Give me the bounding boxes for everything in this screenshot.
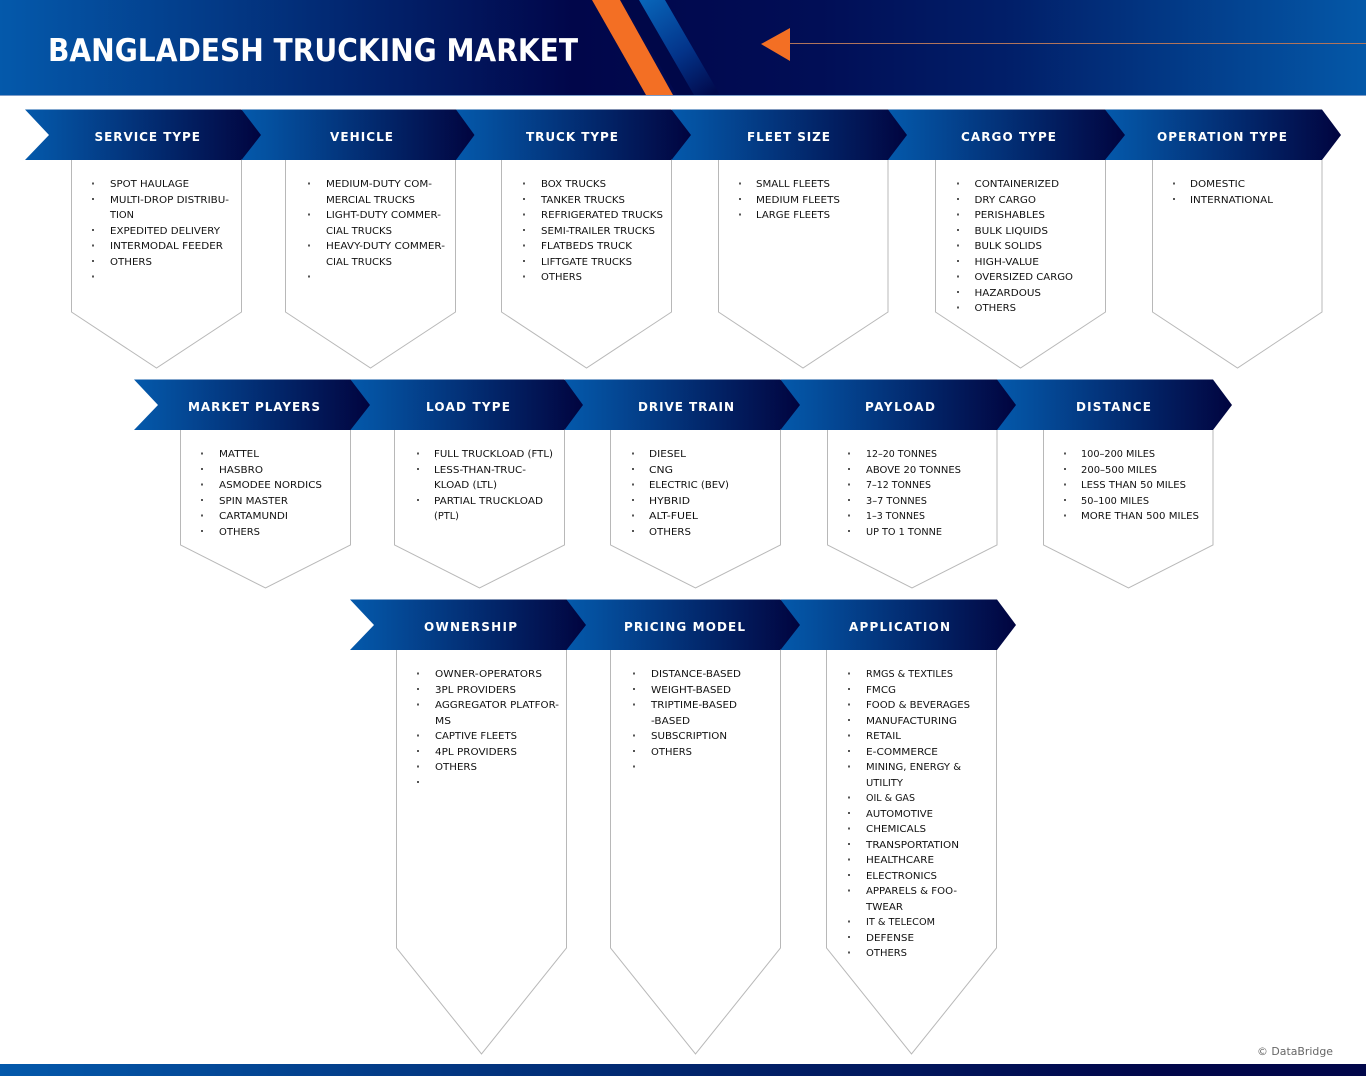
panel: payload: PAYLOAD xyxy=(865,400,935,414)
panel: operation type xyxy=(1105,110,1341,368)
panel: payload: 1–3 TONNES xyxy=(866,511,925,522)
copyright credit: © DataBridge xyxy=(1257,1045,1333,1058)
panel: application: IT & TELECOM xyxy=(866,917,935,928)
panel: market players: MARKET PLAYERS xyxy=(188,400,320,414)
panel: application: APPLICATION xyxy=(849,620,950,634)
panel: pricing model xyxy=(566,600,800,1054)
panel: application: TWEAR xyxy=(865,902,903,913)
panel: application: TRANSPORTATION xyxy=(865,840,959,851)
panel: application: FMCG xyxy=(866,685,896,696)
panel: load type: LOAD TYPE xyxy=(426,400,510,414)
panel: fleet size: FLEET SIZE xyxy=(747,130,830,144)
panel: cargo type: HIGH-VALUE xyxy=(974,257,1039,268)
panel: application: DEFENSE xyxy=(866,933,914,944)
panel: load type: KLOAD (LTL) xyxy=(434,480,497,491)
panel: service type: TION xyxy=(109,210,134,221)
panel: payload: 3–7 TONNES xyxy=(866,496,927,507)
panel: distance: MORE THAN 500 MILES xyxy=(1081,511,1199,522)
panel: truck type: TANKER TRUCKS xyxy=(540,195,625,206)
panel: payload: UP TO 1 TONNE xyxy=(866,527,942,538)
panel: payload: 12–20 TONNES xyxy=(866,449,937,460)
panel: service type: INTERMODAL FEEDER xyxy=(110,241,223,252)
panel: drive train: DIESEL xyxy=(649,449,687,460)
title: BANGLADESH TRUCKING MARKET xyxy=(48,33,578,69)
panel: drive train: CNG xyxy=(649,465,673,476)
panel: truck type xyxy=(456,110,691,368)
panel: cargo type: OTHERS xyxy=(974,303,1016,314)
panel: pricing model: OTHERS xyxy=(651,747,692,758)
panel: service type: SPOT HAULAGE xyxy=(110,179,189,190)
footer bar xyxy=(0,1064,1366,1076)
row 2 of categories xyxy=(134,380,1232,588)
panel: load type: (PTL) xyxy=(434,511,459,522)
panel: market players: HASBRO xyxy=(219,465,263,476)
panel: truck type: SEMI-TRAILER TRUCKS xyxy=(541,226,655,237)
panel: fleet size: SMALL FLEETS xyxy=(756,179,830,190)
orange diagonal stripe xyxy=(592,0,673,95)
panel: application: MINING, ENERGY & xyxy=(866,762,961,773)
panel: market players: MATTEL xyxy=(219,449,260,460)
panel: pricing model: WEIGHT-BASED xyxy=(651,685,731,696)
panel: distance: LESS THAN 50 MILES xyxy=(1081,480,1186,491)
panel: application: FOOD & BEVERAGES xyxy=(866,700,970,711)
panel: ownership: OWNERSHIP xyxy=(424,620,517,634)
panel: market players: OTHERS xyxy=(219,527,260,538)
panel: ownership: 4PL PROVIDERS xyxy=(435,747,517,758)
panel: service type: MULTI-DROP DISTRIBU- xyxy=(110,195,229,206)
panel: vehicle: CIAL TRUCKS xyxy=(326,226,392,237)
panel: distance: 100–200 MILES xyxy=(1081,449,1155,460)
panel: service type: OTHERS xyxy=(110,257,152,268)
panel: truck type: LIFTGATE TRUCKS xyxy=(541,257,632,268)
panel: ownership xyxy=(350,600,586,1054)
panel: distance: DISTANCE xyxy=(1076,400,1151,414)
panel: cargo type: BULK SOLIDS xyxy=(974,241,1042,252)
arrow xyxy=(761,28,1366,61)
panel: cargo type: CARGO TYPE xyxy=(961,130,1056,144)
panel: ownership: 3PL PROVIDERS xyxy=(435,685,516,696)
panel: pricing model: -BASED xyxy=(651,716,690,727)
panel: vehicle: MEDIUM-DUTY COM- xyxy=(326,179,432,190)
panel: payload: 7–12 TONNES xyxy=(866,480,931,491)
panel: ownership: OWNER-OPERATORS xyxy=(435,669,542,680)
panel: market players: ASMODEE NORDICS xyxy=(219,480,322,491)
panel: application: AUTOMOTIVE xyxy=(866,809,933,820)
panel: application: RMGS & TEXTILES xyxy=(866,669,953,680)
panel: pricing model: TRIPTIME-BASED xyxy=(650,700,737,711)
panel: pricing model: PRICING MODEL xyxy=(624,620,745,634)
panel: pricing model: DISTANCE-BASED xyxy=(651,669,741,680)
panel: cargo type xyxy=(888,110,1125,368)
panel: payload xyxy=(781,380,1016,588)
panel: drive train: HYBRID xyxy=(649,496,690,507)
panel: drive train xyxy=(565,380,800,588)
panel: service type: SERVICE TYPE xyxy=(94,130,200,144)
panel: payload: ABOVE 20 TONNES xyxy=(866,465,961,476)
panel: load type: LESS-THAN-TRUC- xyxy=(434,465,526,476)
panel: vehicle: LIGHT-DUTY COMMER- xyxy=(326,210,441,221)
panel: fleet size xyxy=(672,110,907,368)
panel: truck type: TRUCK TYPE xyxy=(526,130,618,144)
panel: application: CHEMICALS xyxy=(866,824,926,835)
row 3 of categories xyxy=(350,600,1016,1054)
panel: cargo type: BULK LIQUIDS xyxy=(974,226,1048,237)
panel: market players xyxy=(134,380,370,588)
panel: application: OIL & GAS xyxy=(866,793,915,804)
panel: distance: 200–500 MILES xyxy=(1081,465,1157,476)
panel: load type: FULL TRUCKLOAD (FTL) xyxy=(434,449,553,460)
panel: application: HEALTHCARE xyxy=(866,855,934,866)
panel: vehicle: MERCIAL TRUCKS xyxy=(326,195,415,206)
panel: application: ELECTRONICS xyxy=(866,871,937,882)
panel: drive train: ALT-FUEL xyxy=(649,511,699,522)
panel: vehicle: CIAL TRUCKS xyxy=(326,257,392,268)
panel: market players: SPIN MASTER xyxy=(219,496,288,507)
panel: cargo type: HAZARDOUS xyxy=(974,288,1041,299)
panel: load type xyxy=(350,380,583,588)
panel: application: UTILITY xyxy=(866,778,903,789)
panel: truck type: OTHERS xyxy=(541,272,582,283)
panel: drive train: OTHERS xyxy=(649,527,691,538)
panel: ownership: OTHERS xyxy=(435,762,477,773)
panel: ownership: AGGREGATOR PLATFOR- xyxy=(435,700,559,711)
panel: cargo type: PERISHABLES xyxy=(974,210,1045,221)
panel: service type: EXPEDITED DELIVERY xyxy=(110,226,220,237)
panel: market players: CARTAMUNDI xyxy=(219,511,288,522)
panel: fleet size: LARGE FLEETS xyxy=(756,210,830,221)
panel: distance: 50–100 MILES xyxy=(1081,496,1149,507)
panel: truck type: REFRIGERATED TRUCKS xyxy=(541,210,663,221)
panel: ownership: MS xyxy=(435,716,451,727)
panel: cargo type: CONTAINERIZED xyxy=(974,179,1059,190)
panel: truck type: BOX TRUCKS xyxy=(541,179,606,190)
panel: fleet size: MEDIUM FLEETS xyxy=(756,195,840,206)
panel: ownership: CAPTIVE FLEETS xyxy=(435,731,517,742)
panel: distance xyxy=(997,380,1232,588)
panel: pricing model: SUBSCRIPTION xyxy=(651,731,727,742)
panel: operation type: INTERNATIONAL xyxy=(1190,195,1274,206)
panel: application xyxy=(781,600,1016,1054)
panel: application: E-COMMERCE xyxy=(866,747,938,758)
panel: drive train: ELECTRIC (BEV) xyxy=(649,480,729,491)
panel: application: APPARELS & FOO- xyxy=(866,886,957,897)
blue diagonal stripe xyxy=(639,0,720,95)
panel: operation type: DOMESTIC xyxy=(1190,179,1245,190)
header banner xyxy=(0,0,1366,96)
panel: operation type: OPERATION TYPE xyxy=(1157,130,1287,144)
panel: truck type: FLATBEDS TRUCK xyxy=(541,241,633,252)
panel: application: OTHERS xyxy=(866,948,907,959)
panel: cargo type: DRY CARGO xyxy=(974,195,1036,206)
panel: vehicle: HEAVY-DUTY COMMER- xyxy=(326,241,445,252)
panel: vehicle: VEHICLE xyxy=(330,130,393,144)
panel: drive train: DRIVE TRAIN xyxy=(638,400,734,414)
panel: application: RETAIL xyxy=(866,731,902,742)
row 1 of categories xyxy=(25,110,1341,368)
panel: load type: PARTIAL TRUCKLOAD xyxy=(434,496,543,507)
panel: service type xyxy=(25,110,261,368)
panel: cargo type: OVERSIZED CARGO xyxy=(974,272,1073,283)
panel: vehicle xyxy=(242,110,474,368)
panel: application: MANUFACTURING xyxy=(866,716,957,727)
